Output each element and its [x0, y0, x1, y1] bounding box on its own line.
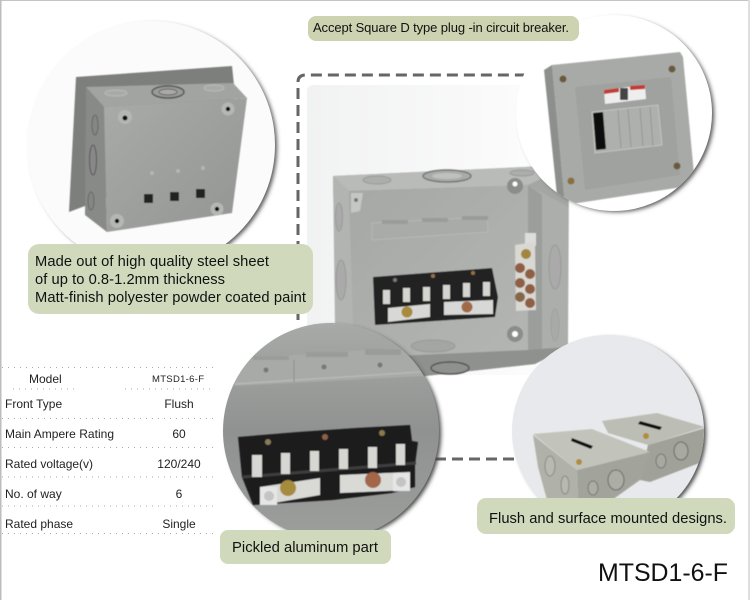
specification table: No. of way	[5, 487, 62, 501]
label: mounting designs	[477, 498, 735, 534]
label: mounting designs: Flush and surface mounted designs.	[489, 511, 727, 527]
specification table: 60	[172, 427, 186, 441]
label: steel sheet description: of up to 0.8-1.2mm thickness	[35, 272, 225, 288]
label: circuit breaker note	[308, 16, 579, 41]
specification table: Rated voltage(v)	[5, 457, 93, 471]
specification table	[2, 368, 215, 534]
specification table: MTSD1-6-F	[152, 374, 204, 385]
specification table: Flush	[164, 397, 194, 411]
label: pickled aluminum part	[220, 530, 391, 564]
main product: open panel box	[333, 165, 569, 385]
specification table: Model	[29, 372, 62, 386]
specification table: Rated phase	[5, 517, 73, 531]
label: steel sheet description: Made out of high quality steel sheet	[35, 254, 269, 270]
circle: flush and surface mounted boxes	[512, 334, 710, 498]
main product panel background	[307, 85, 577, 375]
circle: pickled aluminum terminal close-up	[220, 323, 441, 540]
dashed frame	[298, 75, 530, 459]
model title: MTSD1-6-F	[598, 559, 728, 587]
specification table: Single	[162, 517, 196, 531]
specification table: 6	[176, 487, 183, 501]
circle: front cover view	[516, 15, 714, 212]
label: circuit breaker note: Accept Square D type plug -in circuit breaker.	[313, 20, 569, 35]
label: steel sheet description	[28, 244, 313, 314]
label: steel sheet description: Matt-finish polyester powder coated paint	[35, 290, 306, 306]
specification table: 120/240	[157, 457, 201, 471]
specification table: Front Type	[5, 397, 62, 411]
label: pickled aluminum part: Pickled aluminum part	[232, 540, 378, 556]
specification table: Main Ampere Rating	[5, 427, 114, 441]
circle: back of enclosure	[34, 20, 280, 244]
